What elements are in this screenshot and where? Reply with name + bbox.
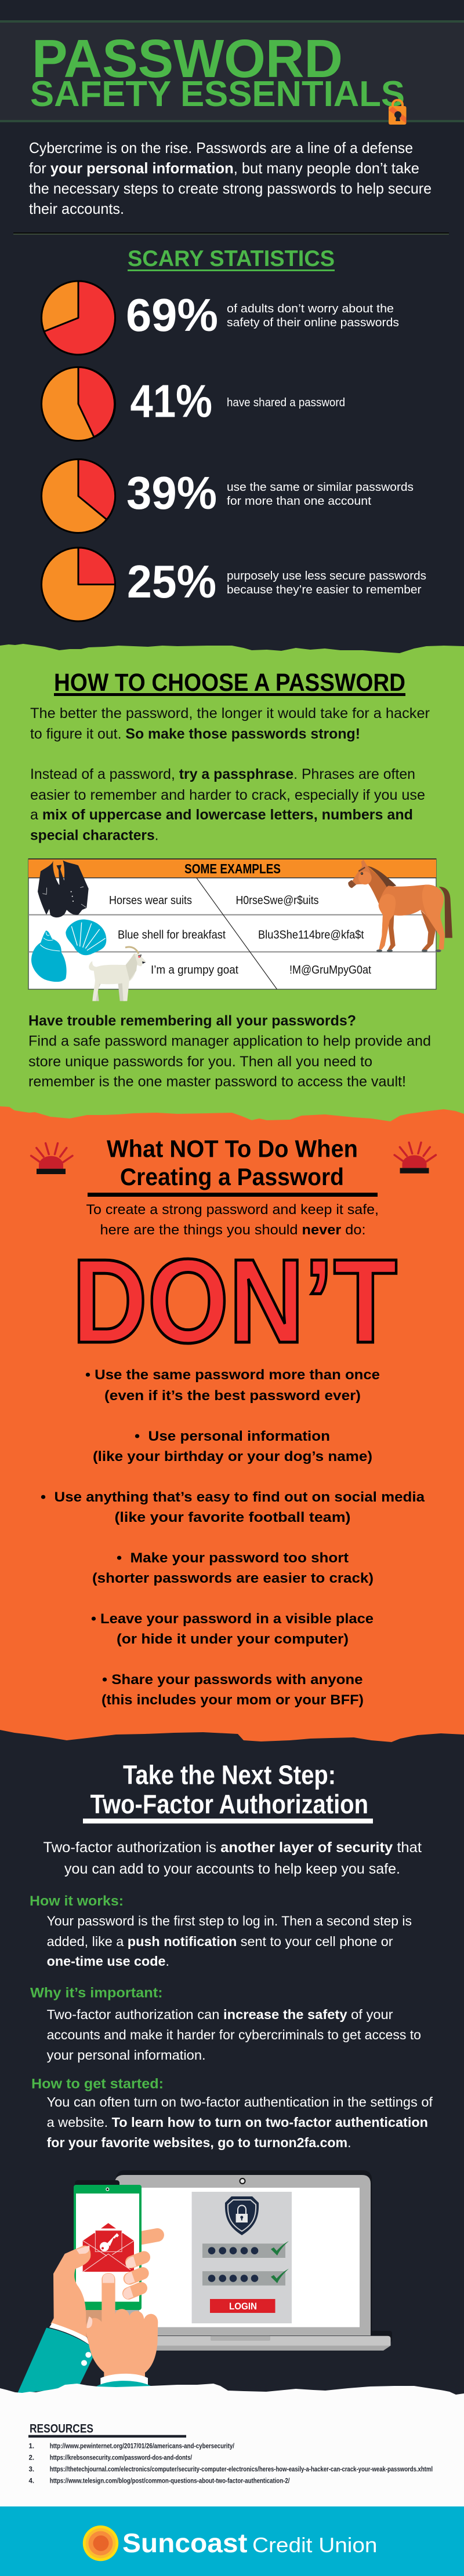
heading: two-factor authorization: [83, 1759, 373, 1823]
list: don'ts: • Use anything that’s easy to find out on social media: [41, 1489, 425, 1505]
text: better password: [30, 705, 430, 742]
text: how it works: Your password is the first step to log in. Then a second step is: [47, 1914, 412, 1929]
list: source links: 2.: [29, 2454, 34, 2461]
icon: suit jacket: [38, 860, 89, 917]
heading: what not to do: Creating a Password: [120, 1163, 344, 1190]
list: don'ts: • Leave your password in a visible place: [91, 1611, 374, 1627]
stat: 25%: purposely use less secure passwords: [227, 570, 426, 582]
list: source links: 1.: [29, 2443, 34, 2450]
text: password manager tip: Have trouble remembering all your passwords?: [28, 1013, 356, 1029]
stat: 25%: because they’re easier to remember: [227, 584, 422, 596]
icon: left siren: [31, 1143, 72, 1174]
text: introduction: Cybercrime is on the rise. Passwords are a line of a defense: [29, 139, 413, 156]
password field 2: [202, 2269, 289, 2286]
text: password manager tip: [28, 1013, 431, 1090]
title: PASSWORD: [32, 28, 343, 89]
logo: sun mark: [83, 2526, 118, 2561]
panel: header: [0, 20, 464, 125]
stat: 39%: use the same or similar passwords: [227, 481, 414, 494]
text: how to get started: [31, 2076, 433, 2150]
table: some examples: SOME EXAMPLES: [184, 861, 281, 876]
illustration: hands holding phone: [17, 2180, 158, 2393]
list: source links: [29, 2443, 433, 2484]
heading: two-factor authorization: Two-Factor Authorization: [90, 1789, 368, 1819]
icon: goat: [89, 947, 146, 1001]
text: intro to don'ts: here are the things you should never do:: [100, 1222, 366, 1238]
password field 1: [202, 2241, 289, 2258]
stat: 69%: safety of their online passwords: [227, 316, 399, 329]
panel: scary statistics: [42, 246, 426, 621]
text: how it works: one-time use code.: [47, 1954, 169, 1969]
title: [30, 28, 405, 114]
text: how to get started: a website. To learn how to turn on two-factor authentication: [47, 2115, 428, 2130]
headline: don't: DON’T: [72, 1234, 397, 1368]
title: SAFETY ESSENTIALS: [30, 74, 405, 114]
text: two-factor intro: you can add to your accounts to help keep you safe.: [64, 1861, 400, 1877]
text: passphrase: easier to remember and harder to crack, especially if you use: [30, 787, 425, 803]
text: why it's important: Two-factor authorization can increase the safety of your: [47, 2007, 393, 2022]
text: intro to don'ts: To create a strong password and keep it safe,: [86, 1202, 379, 1218]
table: some examples: !M@GruMpyG0at: [289, 964, 371, 977]
icon: security shield: [225, 2196, 259, 2235]
table: some examples: H0rseSwe@r$uits: [235, 894, 319, 907]
list: don'ts: • Use personal information: [135, 1429, 330, 1444]
icon: right siren: [394, 1142, 436, 1174]
text: introduction: [29, 139, 432, 217]
icon: horse: [348, 859, 452, 952]
heading: what not to do: What NOT To Do When: [107, 1135, 358, 1163]
stat: 41%: [42, 367, 345, 440]
panel: how to choose a password: [0, 644, 464, 1136]
text: password manager tip: remember is the one master password to access the vault!: [28, 1073, 406, 1090]
list: don'ts: (this includes your mom or your BFF): [102, 1692, 364, 1708]
text: introduction: their accounts.: [29, 200, 124, 217]
text: introduction: for your personal information, but many people don’t take: [29, 159, 419, 177]
text: passphrase: special characters.: [30, 828, 159, 844]
logo: wordmark: Suncoast: [122, 2528, 247, 2558]
stat: 41%: have shared a password: [227, 396, 345, 409]
heading: how to choose a password: HOW TO CHOOSE A PASSWORD: [54, 669, 405, 697]
text: why it's important: your personal information.: [47, 2047, 206, 2063]
list: source links: 4.: [29, 2477, 34, 2484]
text: why it's important: [30, 1985, 421, 2063]
text: two-factor intro: [43, 1839, 422, 1877]
list: source links: https://www.telesign.com/blog/post/common-questions-about-two-factor-authentication-2/: [50, 2477, 290, 2484]
login button: LOGIN: [229, 2301, 257, 2312]
login panel: [192, 2192, 292, 2323]
illustration: laptop login: [115, 2170, 392, 2351]
text: password manager tip: store unique passwords for you. Then all you need to: [28, 1054, 372, 1070]
table: some examples: Blue shell for breakfast: [118, 928, 226, 941]
list: don'ts: (like your birthday or your dog’s name): [93, 1449, 372, 1464]
list: source links: https://krebsonsecurity.com/password-dos-and-donts/: [50, 2454, 193, 2461]
table: some examples: I’m a grumpy goat: [151, 964, 238, 977]
list: don'ts: (shorter passwords are easier to crack): [92, 1571, 374, 1586]
text: how to get started: for your favorite websites, go to turnon2fa.com.: [47, 2135, 351, 2150]
text: how it works: [30, 1893, 412, 1969]
heading: scary statistics: SCARY STATISTICS: [128, 246, 335, 271]
list: don'ts: • Use the same password more than once: [85, 1367, 380, 1383]
list: don'ts: • Make your password too short: [117, 1550, 349, 1566]
text: why it's important: Why it’s important:: [30, 1985, 163, 2001]
logo: wordmark: [122, 2528, 377, 2558]
text: how it works: added, like a push notification sent to your cell phone or: [47, 1934, 393, 1949]
list: source links: http://www.pewinternet.org/2017/01/26/americans-and-cybersecurity/: [50, 2443, 235, 2450]
text: better password: The better the password, the longer it would take for a hacker: [30, 705, 430, 722]
stat: 25%: 25%: [127, 556, 216, 607]
text: how it works: How it works:: [30, 1893, 124, 1909]
logo: wordmark: Credit Union: [252, 2533, 377, 2557]
stat: 41%: 41%: [130, 376, 212, 427]
stat: 25%: [42, 548, 426, 621]
login button: [210, 2299, 275, 2313]
left hand: [17, 2246, 93, 2393]
list: source links: 3.: [29, 2466, 34, 2473]
text: introduction: the necessary steps to create strong passwords to help secure: [29, 180, 432, 197]
text: passphrase: [30, 766, 425, 844]
heading: what not to do: [88, 1135, 378, 1197]
list: don'ts: • Share your passwords with anyone: [102, 1672, 363, 1688]
right hand: [85, 2273, 158, 2389]
heading: resources: [28, 2422, 186, 2437]
text: passphrase: Instead of a password, try a passphrase. Phrases are often: [30, 766, 415, 782]
stat: 39%: [42, 459, 414, 533]
table: some examples: Blu3She114bre@kfa$t: [258, 928, 364, 941]
panel: two-factor authorization: [0, 1730, 464, 2434]
list: don'ts: (even if it’s the best password ever): [104, 1388, 361, 1404]
table: some examples: [28, 859, 436, 989]
list: don'ts: (like your favorite football team): [115, 1510, 350, 1525]
icon: envelope with key: [83, 2223, 134, 2272]
text: how to get started: You can often turn on two-factor authentication in the settings of: [47, 2094, 433, 2109]
text: intro to don'ts: [86, 1202, 379, 1238]
text: how to get started: How to get started:: [31, 2076, 164, 2092]
icon: padlock: [389, 100, 406, 125]
right fingers: [123, 2256, 144, 2299]
text: better password: to figure it out. So make those passwords strong!: [30, 726, 360, 742]
table: some examples: Horses wear suits: [109, 894, 192, 907]
stat: 69%: [42, 281, 399, 355]
panel: what not to do: [0, 1106, 464, 1750]
panel: resources: [0, 2384, 464, 2509]
icon: sea shells: [31, 919, 106, 982]
text: passphrase: a mix of uppercase and lowercase letters, numbers and: [30, 807, 413, 823]
stat: 69%: of adults don’t worry about the: [227, 303, 394, 315]
text: password manager tip: Find a safe password manager application to help provide and: [28, 1033, 431, 1049]
list: don'ts: [41, 1367, 425, 1708]
heading: two-factor authorization: Take the Next Step:: [123, 1759, 336, 1790]
stat: 39%: 39%: [126, 467, 217, 519]
panel: footer: [0, 2506, 464, 2576]
text: two-factor intro: Two-factor authorization is another layer of security that: [43, 1839, 422, 1856]
stat: 39%: for more than one account: [227, 495, 371, 508]
stat: 69%: 69%: [126, 289, 218, 341]
heading: resources: RESOURCES: [30, 2422, 93, 2435]
text: why it's important: accounts and make it harder for cybercriminals to get access to: [47, 2027, 421, 2042]
list: don'ts: (or hide it under your computer): [117, 1631, 349, 1647]
